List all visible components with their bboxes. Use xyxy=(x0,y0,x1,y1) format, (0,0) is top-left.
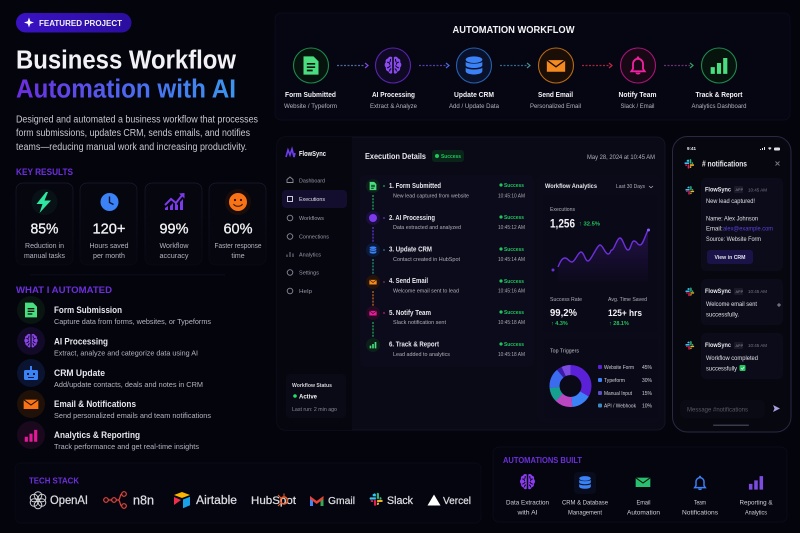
logo: vercel: Vercel xyxy=(443,496,471,507)
arrow 3 xyxy=(500,63,530,68)
panel: key result cards xyxy=(16,183,266,265)
step 2 xyxy=(366,211,525,242)
card: 60% xyxy=(209,183,266,265)
metric: time saved: ↑ 28.1% xyxy=(609,321,629,327)
step 6: 10:45:18 AM xyxy=(498,352,525,358)
home indicator xyxy=(713,424,749,426)
step 6 xyxy=(366,338,525,358)
item: reporting and analytics: Analytics xyxy=(745,510,768,516)
card: 99%: accuracy xyxy=(160,253,189,260)
badge: featured project xyxy=(16,13,132,32)
nav items: Dashboard xyxy=(299,178,325,184)
item: data extraction xyxy=(506,474,549,516)
metric: time saved xyxy=(608,297,647,327)
message 1: Email: xyxy=(706,226,723,232)
message input: Message #notifications xyxy=(687,408,748,414)
message 1: New lead captured! xyxy=(706,199,755,205)
card: 99% xyxy=(145,183,202,265)
item: reporting and analytics: Reporting & xyxy=(740,500,773,506)
step: send email: Send Email xyxy=(538,90,573,99)
item: data extraction: with AI xyxy=(516,510,538,516)
step 1: 1. Form Submitted xyxy=(389,183,441,190)
message 2: FlowSync xyxy=(705,288,731,295)
chart: top triggers: API / Webhook xyxy=(604,404,636,410)
message 1 xyxy=(685,178,783,271)
item: email automation: Email xyxy=(636,500,651,506)
step 2: 2. AI Processing xyxy=(389,215,435,222)
step 4: 10:45:16 AM xyxy=(498,288,525,294)
item: email and notifications: Send personalized emails and team notifications xyxy=(54,411,211,420)
message 2: 10:45 AM xyxy=(748,289,767,294)
step: update crm xyxy=(449,48,499,110)
heading: automation workflow: AUTOMATION WORKFLOW xyxy=(452,25,575,36)
heading: execution details xyxy=(365,150,464,162)
logo: openai xyxy=(30,492,88,509)
card: 60%: 60% xyxy=(224,222,253,238)
metric: success rate: ↑ 4.3% xyxy=(551,321,568,327)
logo: slack: Slack xyxy=(387,495,413,507)
item: email automation: Automation xyxy=(627,510,660,516)
message 3: 10:45 AM xyxy=(748,343,767,348)
arrow 5 xyxy=(664,63,693,68)
metric: success rate xyxy=(550,297,582,327)
heading: what i automated: WHAT I AUTOMATED xyxy=(16,285,112,296)
arrow 2 xyxy=(419,63,449,68)
panel: workflow analytics: Last 30 Days xyxy=(616,184,645,190)
message 2: Welcome email sent xyxy=(706,302,757,308)
heading: key results: KEY RESULTS xyxy=(16,167,73,177)
message 3: successfully xyxy=(706,366,737,372)
nav items: Workflows xyxy=(299,216,324,222)
step 5: 10:45:18 AM xyxy=(498,320,525,326)
nav items: Executions xyxy=(299,197,325,203)
step 4: Success xyxy=(504,279,524,285)
message 3 xyxy=(685,333,783,379)
item: ai processing: Extract, analyze and categorize data using AI xyxy=(54,348,198,358)
nav items: Settings xyxy=(299,270,319,276)
card: 99%: Workflow xyxy=(160,243,189,250)
step 1: New lead captured from website xyxy=(393,194,469,200)
step: track and report: Track & Report xyxy=(696,90,743,99)
phone: slack notifications xyxy=(672,136,791,432)
workflow status: Last run: 2 min ago xyxy=(292,407,337,413)
metric: success rate: Success Rate xyxy=(550,297,582,303)
message 2: successfully. xyxy=(706,312,739,318)
step: send email xyxy=(530,48,581,110)
item: ai processing: AI Processing xyxy=(54,336,108,346)
arrow 1 xyxy=(337,63,368,68)
step 3: Contact created in HubSpot xyxy=(393,257,460,263)
chart: executions xyxy=(543,195,657,332)
chart: top triggers: 15% xyxy=(642,391,652,397)
card: 85%: manual tasks xyxy=(24,253,65,260)
card: 120+: per month xyxy=(93,253,125,260)
logo: n8n: n8n xyxy=(133,492,154,508)
step: notify team: Slack / Email xyxy=(620,103,654,110)
message 2: APP xyxy=(736,290,744,294)
step 4 xyxy=(366,275,525,306)
message input xyxy=(680,400,780,418)
step 1: 10:45:10 AM xyxy=(498,194,525,200)
heading: automations built: AUTOMATIONS BUILT xyxy=(503,456,582,465)
logo: n8n xyxy=(104,492,154,508)
item: analytics and reporting: Track performance and get real-time insights xyxy=(54,442,199,451)
badge: featured project: FEATURED PROJECT xyxy=(39,19,122,28)
nav items: Analytics xyxy=(299,252,321,258)
card: 120+: 120+ xyxy=(92,222,126,238)
step: ai processing: AI Processing xyxy=(372,90,415,99)
heading: execution details: Success xyxy=(441,154,461,160)
workflow status: Active xyxy=(299,394,318,400)
panel: execution steps xyxy=(360,175,534,367)
item: analytics and reporting: Analytics & Reporting xyxy=(54,430,140,440)
card: 60%: Faster response xyxy=(214,243,262,250)
item: crm and database xyxy=(562,472,608,516)
card: 85%: Reduction in xyxy=(25,243,64,250)
step: track and report: Analytics Dashboard xyxy=(692,103,747,110)
chart: top triggers: 45% xyxy=(642,365,652,371)
logo: slack xyxy=(370,493,413,507)
step 5 xyxy=(366,306,525,337)
step 5: Success xyxy=(504,310,524,316)
item: analytics and reporting xyxy=(17,421,199,451)
message 1: View in CRM xyxy=(714,255,746,261)
step 4: 4. Send Email xyxy=(389,278,428,285)
item: team notifications xyxy=(682,476,719,516)
step 1: Success xyxy=(504,183,524,189)
step 2: 10:45:12 AM xyxy=(498,225,525,231)
step: update crm: Add / Update Data xyxy=(449,103,499,110)
logo: flowsync xyxy=(286,149,326,158)
item: ai processing xyxy=(17,327,198,358)
message 3: FlowSync xyxy=(705,342,731,349)
chart: executions: ↑ 32.5% xyxy=(579,222,600,228)
chart: top triggers: 30% xyxy=(642,378,652,384)
step 3: 10:45:14 AM xyxy=(498,257,525,263)
nav items: Connections xyxy=(299,234,329,240)
logo: vercel xyxy=(428,494,471,507)
item: email and notifications xyxy=(17,390,211,420)
step: update crm: Update CRM xyxy=(454,90,494,99)
chart: top triggers: Manual Input xyxy=(604,391,632,397)
panel: dashboard xyxy=(277,137,665,430)
card: 60%: time xyxy=(231,253,245,260)
chat header xyxy=(684,159,780,169)
chart: top triggers: 10% xyxy=(642,404,652,410)
nav items: Help xyxy=(299,289,312,295)
step 3 xyxy=(366,243,525,274)
heading: tech stack: TECH STACK xyxy=(29,476,79,486)
description text: form submissions, updates CRM, sends emails, and notifies xyxy=(16,128,250,139)
step 5: Slack notification sent xyxy=(393,320,446,326)
chart: executions: Executions xyxy=(550,207,575,213)
chat header: # notifications xyxy=(702,160,747,168)
logo: flowsync: FlowSync xyxy=(299,149,326,158)
panel: tech stack xyxy=(15,463,481,523)
logo: hubspot: HubSpot xyxy=(251,495,296,507)
step 6: 6. Track & Report xyxy=(389,342,440,348)
message 1: 10:45 AM xyxy=(748,188,767,192)
panel: automations built xyxy=(493,447,787,522)
item: crm and database: CRM & Database xyxy=(562,500,608,506)
chart: top triggers: Website Form xyxy=(604,365,634,371)
step: ai processing xyxy=(370,48,417,110)
panel: automation workflow xyxy=(275,13,790,120)
item: form submission xyxy=(17,296,211,326)
item: data extraction: Data Extraction xyxy=(506,500,549,506)
chart: top triggers: Top Triggers xyxy=(550,348,579,354)
timestamp: May 28, 2024 at 10:45 AM xyxy=(587,155,655,161)
arrow 4 xyxy=(582,63,612,68)
step 1 xyxy=(366,179,525,210)
title: Automation with AI xyxy=(16,76,236,104)
card: 99%: 99% xyxy=(160,222,189,238)
message 3: APP xyxy=(736,344,744,348)
step 2: Data extracted and analyzed xyxy=(393,225,461,231)
chart: top triggers xyxy=(544,339,658,418)
panel: workflow analytics xyxy=(537,175,661,423)
step: track and report xyxy=(692,48,747,110)
title: Business Workflow xyxy=(16,46,236,74)
step 3: Success xyxy=(504,247,524,253)
description text: Designed and automated a business workflow that processes xyxy=(16,114,258,126)
step: notify team: Notify Team xyxy=(618,90,657,99)
metric: success rate: 99,2% xyxy=(550,308,577,319)
description text: teams—reducing manual work and increasing productivity. xyxy=(16,142,247,153)
step: form submitted: Website / Typeform xyxy=(284,103,337,110)
item: crm update: CRM Update xyxy=(54,368,105,378)
step 3: 3. Update CRM xyxy=(389,246,432,254)
heading: execution details: Execution Details xyxy=(365,152,427,161)
description text xyxy=(16,114,258,153)
message 1: alex@example.com xyxy=(723,226,773,232)
step 2: Success xyxy=(504,215,524,221)
card: 85%: 85% xyxy=(30,222,59,238)
message 3: Workflow completed xyxy=(706,356,758,362)
item: team notifications: Team xyxy=(694,500,706,506)
list: what i automated xyxy=(17,296,211,451)
logo: gmail: Gmail xyxy=(328,495,355,507)
nav items xyxy=(287,177,329,295)
sidebar xyxy=(277,137,352,430)
message 2 xyxy=(685,279,783,325)
chart: executions: 1,256 xyxy=(550,218,575,230)
workflow status xyxy=(286,374,346,418)
status bar: 9:41 xyxy=(687,146,697,151)
chart: top triggers: Typeform xyxy=(604,378,625,384)
item: team notifications: Notifications xyxy=(682,510,719,516)
step: form submitted xyxy=(284,48,337,110)
item: email and notifications: Email & Notifications xyxy=(54,399,136,409)
item: crm update xyxy=(17,359,203,389)
step: notify team xyxy=(618,48,657,110)
title xyxy=(16,46,236,104)
logo: airtable xyxy=(174,492,237,508)
step 4: Welcome email sent to lead xyxy=(393,288,459,294)
item: form submission: Form Submission xyxy=(54,305,122,315)
panel: workflow analytics: Workflow Analytics xyxy=(545,183,597,190)
step: ai processing: Extract & Analyze xyxy=(370,103,417,110)
workflow status: Workflow Status xyxy=(292,383,332,389)
card: 120+: Hours saved xyxy=(90,243,129,250)
step: form submitted: Form Submitted xyxy=(285,90,336,99)
message 1: Name: Alex Johnson xyxy=(706,216,758,222)
item: crm and database: Management xyxy=(568,510,602,516)
message 1: Source: Website Form xyxy=(706,237,761,243)
step 6: Lead added to analytics xyxy=(393,352,450,358)
step 6: Success xyxy=(504,342,524,348)
message 1: FlowSync xyxy=(705,186,731,194)
item: form submission: Capture data from forms, websites, or Typeforms xyxy=(54,317,211,326)
card: 120+ xyxy=(80,183,137,265)
card: 85% xyxy=(16,183,73,265)
metric: time saved: Avg. Time Saved xyxy=(608,297,647,303)
status bar xyxy=(687,146,780,151)
active nav highlight xyxy=(282,190,347,208)
item: reporting and analytics xyxy=(740,476,773,516)
metric: time saved: 125+ hrs xyxy=(608,308,642,319)
step 5: 5. Notify Team xyxy=(389,310,431,317)
logo: openai: OpenAI xyxy=(50,495,88,507)
message 1: APP xyxy=(736,188,744,192)
item: email automation xyxy=(627,478,660,516)
logo: gmail xyxy=(310,495,355,507)
logo: airtable: Airtable xyxy=(196,495,237,507)
step: send email: Personalized Email xyxy=(530,103,581,110)
item: crm update: Add/update contacts, deals and notes in CRM xyxy=(54,380,203,389)
